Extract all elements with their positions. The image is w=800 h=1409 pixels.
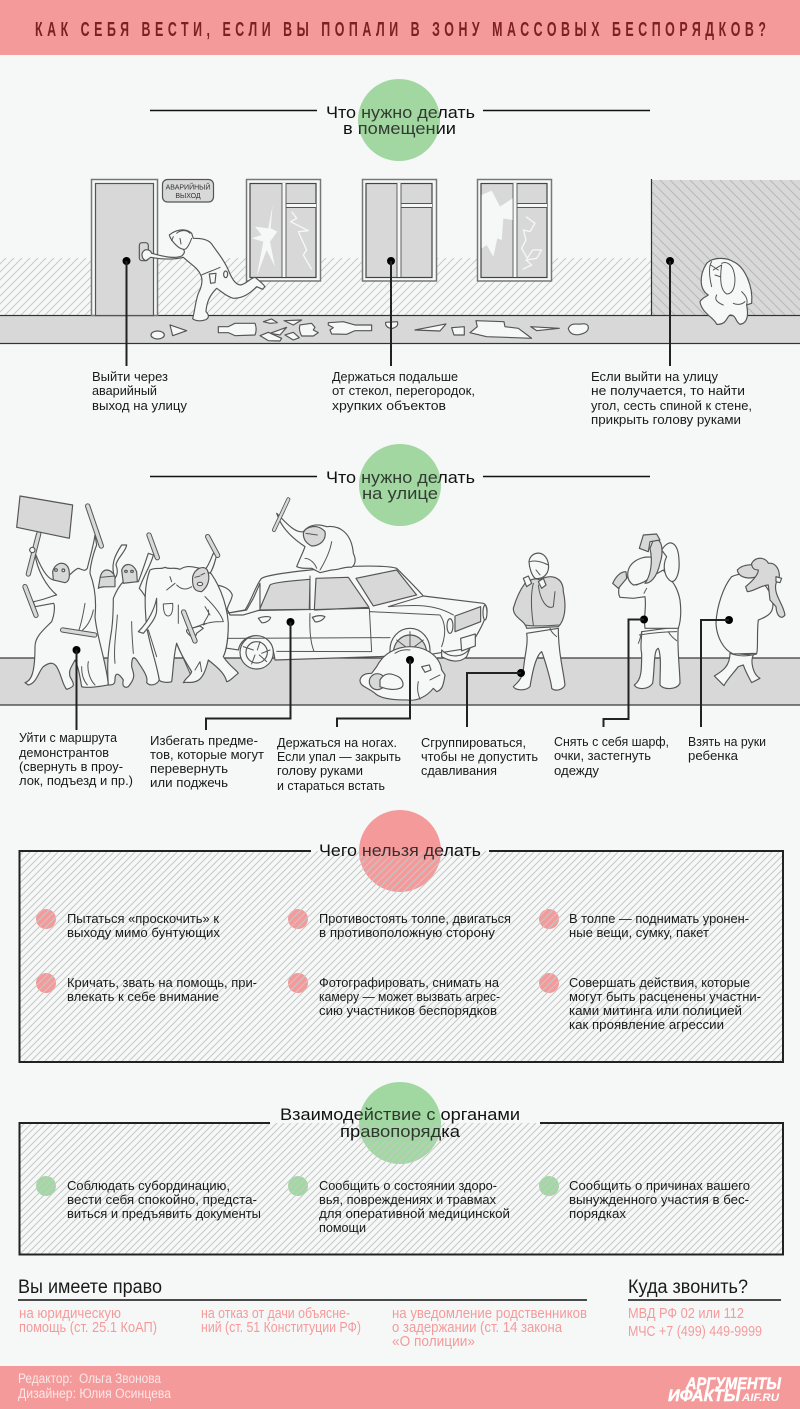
text: carry child: ребенка bbox=[688, 748, 739, 763]
text: stay on your feet: и стараться встать bbox=[277, 778, 385, 793]
item: don't shout: влекать к себе внимание bbox=[67, 989, 219, 1004]
item: explain reasons: порядках bbox=[569, 1206, 627, 1221]
text: exit the building bbox=[92, 369, 187, 413]
item: don't go against the crowd: Противостоять толпе, двигаться bbox=[319, 911, 511, 926]
text: sit in a corner: Если выйти на улицу bbox=[591, 369, 718, 384]
text: sit in a corner bbox=[591, 369, 752, 427]
panel: what not to do bbox=[19, 810, 783, 1062]
text: carry child: Взять на руки bbox=[688, 734, 766, 749]
right: legal help bbox=[19, 1306, 157, 1336]
right: legal help: помощь (ст. 25.1 КоАП) bbox=[19, 1320, 157, 1336]
text: avoid objects: перевернуть bbox=[150, 761, 228, 776]
item: don't rush past bbox=[67, 911, 221, 940]
text: sit in a corner: угол, сесть спиной к стене, bbox=[591, 398, 752, 413]
text: exit the building: аварийный bbox=[92, 383, 157, 398]
panel heading bbox=[280, 1082, 520, 1142]
item: don't shout: Кричать, звать на помощь, при- bbox=[67, 975, 257, 990]
text: stay away from glass: хрупких объектов bbox=[332, 398, 446, 413]
emergency exit sign: АВАРИЙНЫЙ bbox=[166, 182, 210, 192]
text: exit the building: выход на улицу bbox=[92, 398, 187, 413]
item: stay calm: виться и предъявить документы bbox=[67, 1206, 261, 1221]
street scene bbox=[0, 496, 800, 705]
woman carrying child bbox=[714, 558, 785, 686]
text: stay away from glass: Держаться подальше bbox=[332, 369, 458, 384]
heading: what to do outside: на улице bbox=[362, 484, 438, 503]
text: sit in a corner: не получается, то найти bbox=[591, 383, 745, 398]
item: no aggression: ками митинга или полицией bbox=[569, 1003, 742, 1018]
item: stay calm bbox=[67, 1178, 261, 1221]
section: who to call: МВД РФ 02 или 112 bbox=[628, 1306, 744, 1322]
logo: АРГУМЕНТЫ bbox=[685, 1374, 782, 1393]
text: stay on your feet: голову руками bbox=[277, 763, 363, 778]
section: who to call: МЧС +7 (499) 449-9999 bbox=[628, 1324, 762, 1340]
item: stay calm: Соблюдать субординацию, bbox=[67, 1178, 230, 1193]
text: carry child bbox=[688, 734, 766, 763]
leader: carry child bbox=[701, 616, 733, 727]
logo bbox=[668, 1374, 782, 1405]
heading: what to do indoors: в помещении bbox=[343, 119, 456, 138]
item: don't pick things up: ные вещи, сумку, пакет bbox=[569, 925, 709, 940]
text: avoid objects bbox=[150, 733, 264, 790]
right: notify relatives: о задержании (ст. 14 закона bbox=[392, 1320, 563, 1336]
panel heading: правопорядка bbox=[340, 1122, 461, 1141]
item: explain reasons: вынужденного участия в бес- bbox=[569, 1192, 749, 1207]
heading: what to do indoors: Что нужно делать bbox=[326, 103, 475, 122]
text: stay away from glass bbox=[332, 369, 475, 413]
text: sit in a corner: прикрыть голову руками bbox=[591, 412, 741, 427]
item: don't rush past: Пытаться «проскочить» к bbox=[67, 911, 219, 926]
running man figure bbox=[139, 230, 265, 321]
panel: interacting with law enforcement bbox=[19, 1082, 783, 1255]
text: stay away from glass: от стекол, перегородок, bbox=[332, 383, 475, 398]
item: don't pick things up bbox=[569, 911, 749, 940]
man with jacket bbox=[513, 553, 565, 690]
text: exit the building: Выйти через bbox=[92, 369, 168, 384]
leader: avoid objects bbox=[206, 618, 294, 730]
heading: what to do indoors bbox=[150, 79, 650, 161]
right: refuse to testify bbox=[201, 1306, 361, 1336]
title: КАК СЕБЯ ВЕСТИ, ЕСЛИ ВЫ ПОПАЛИ В ЗОНУ МАССОВЫХ БЕСПОРЯДКОВ? bbox=[35, 18, 766, 41]
right: refuse to testify: ний (ст. 51 Конституции РФ) bbox=[201, 1320, 361, 1336]
crowd of rioters bbox=[17, 496, 260, 689]
item: report health: Сообщить о состоянии здоро- bbox=[319, 1178, 497, 1193]
right: refuse to testify: на отказ от дачи объясне- bbox=[201, 1306, 350, 1322]
item: no aggression: Совершать действия, которые bbox=[569, 975, 750, 990]
item: explain reasons: Сообщить о причинах вашего bbox=[569, 1178, 750, 1193]
section: your rights: Вы имеете право bbox=[18, 1277, 162, 1298]
item: no aggression: как проявление агрессии bbox=[569, 1017, 724, 1032]
text: huddle up: сдавливания bbox=[421, 763, 497, 778]
item: explain reasons bbox=[569, 1178, 750, 1221]
text: stay on your feet: Если упал — закрыть bbox=[277, 749, 401, 764]
leader: take off scarf bbox=[604, 616, 648, 727]
text: leave the route: лок, подъезд и пр.) bbox=[19, 773, 133, 788]
leader: stay away from glass bbox=[387, 257, 395, 366]
heading: what to do outside: Что нужно делать bbox=[326, 468, 475, 487]
crouching person figure bbox=[700, 258, 752, 324]
credits: Дизайнер: Юлия Осинцева bbox=[18, 1386, 171, 1401]
item: report health: для оперативной медицинской bbox=[319, 1206, 510, 1221]
emergency exit sign: ВЫХОД bbox=[175, 193, 201, 200]
footer bbox=[0, 1366, 800, 1409]
item: don't go against the crowd: в противоположную сторону bbox=[319, 925, 496, 940]
text: take off scarf: очки, застегнуть bbox=[554, 748, 651, 763]
item: don't rush past: выходу мимо бунтующих bbox=[67, 925, 221, 940]
text: huddle up bbox=[421, 735, 538, 778]
text: leave the route bbox=[19, 730, 133, 788]
text: take off scarf bbox=[554, 734, 669, 778]
debris on the floor bbox=[151, 319, 588, 341]
item: stay calm: вести себя спокойно, предста- bbox=[67, 1192, 257, 1207]
right: notify relatives: «О полиции» bbox=[392, 1334, 475, 1350]
text: stay on your feet bbox=[277, 735, 401, 793]
text: take off scarf: одежду bbox=[554, 763, 599, 778]
text: leave the route: (свернуть в проу- bbox=[19, 759, 123, 774]
leader: stay on your feet bbox=[337, 656, 414, 727]
text: avoid objects: Избегать предме- bbox=[150, 733, 258, 748]
text: stay on your feet: Держаться на ногах. bbox=[277, 735, 397, 750]
right: legal help: на юридическую bbox=[19, 1306, 121, 1322]
item: don't photograph: Фотографировать, снимать на bbox=[319, 975, 500, 990]
fallen person bbox=[360, 647, 445, 700]
item: don't photograph: камеру — может вызвать агрес- bbox=[319, 989, 500, 1004]
leader: sit in a corner bbox=[666, 257, 674, 366]
item: report health: вья, повреждениях и травмах bbox=[319, 1192, 496, 1207]
emergency exit sign bbox=[162, 180, 214, 202]
logo: AIF.RU bbox=[741, 1392, 780, 1404]
section: who to call: Куда звонить? bbox=[628, 1277, 748, 1298]
item: no aggression: могут быть расценены участни- bbox=[569, 989, 761, 1004]
text: avoid objects: тов, которые могут bbox=[150, 747, 264, 762]
credits: Редактор: Ольга Звонова bbox=[18, 1371, 161, 1386]
text: avoid objects: или поджечь bbox=[150, 775, 228, 790]
item: don't photograph: сию участников беспорядков bbox=[319, 1003, 497, 1018]
panel heading: Чего нельзя делать bbox=[319, 841, 481, 860]
item: report health bbox=[319, 1178, 510, 1235]
leader: exit the building bbox=[122, 257, 130, 366]
broken window 3 bbox=[478, 180, 552, 281]
panel heading bbox=[319, 813, 481, 860]
credits bbox=[18, 1371, 171, 1401]
leader: huddle up bbox=[467, 669, 525, 727]
text: huddle up: чтобы не допустить bbox=[421, 749, 538, 764]
heading: what to do outside bbox=[150, 444, 650, 526]
text: huddle up: Сгруппироваться, bbox=[421, 735, 526, 750]
text: leave the route: Уйти с маршрута bbox=[19, 730, 118, 745]
right: notify relatives: на уведомление родственников bbox=[392, 1306, 587, 1322]
right: notify relatives bbox=[392, 1306, 587, 1350]
logo: ИФАКТЫ bbox=[668, 1386, 741, 1405]
item: don't shout bbox=[67, 975, 257, 1004]
leader: leave the route bbox=[72, 646, 80, 730]
item: don't pick things up: В толпе — поднимать уронен- bbox=[569, 911, 749, 926]
section: your rights bbox=[18, 1277, 587, 1350]
door bbox=[92, 180, 158, 316]
car bbox=[217, 566, 487, 669]
item: report health: помощи bbox=[319, 1220, 366, 1235]
section: who to call bbox=[628, 1277, 781, 1340]
header banner bbox=[0, 0, 800, 55]
man taking off scarf bbox=[613, 534, 681, 689]
item: no aggression bbox=[569, 975, 761, 1032]
window 2 bbox=[362, 180, 436, 281]
panel heading: Взаимодействие с органами bbox=[280, 1105, 520, 1124]
text: take off scarf: Снять с себя шарф, bbox=[554, 734, 669, 749]
item: don't go against the crowd bbox=[319, 911, 511, 940]
broken window 1 bbox=[246, 180, 320, 281]
indoor scene bbox=[0, 179, 800, 344]
text: leave the route: демонстрантов bbox=[19, 745, 109, 760]
item: don't photograph bbox=[319, 975, 500, 1018]
rioter on car roof bbox=[274, 499, 355, 573]
